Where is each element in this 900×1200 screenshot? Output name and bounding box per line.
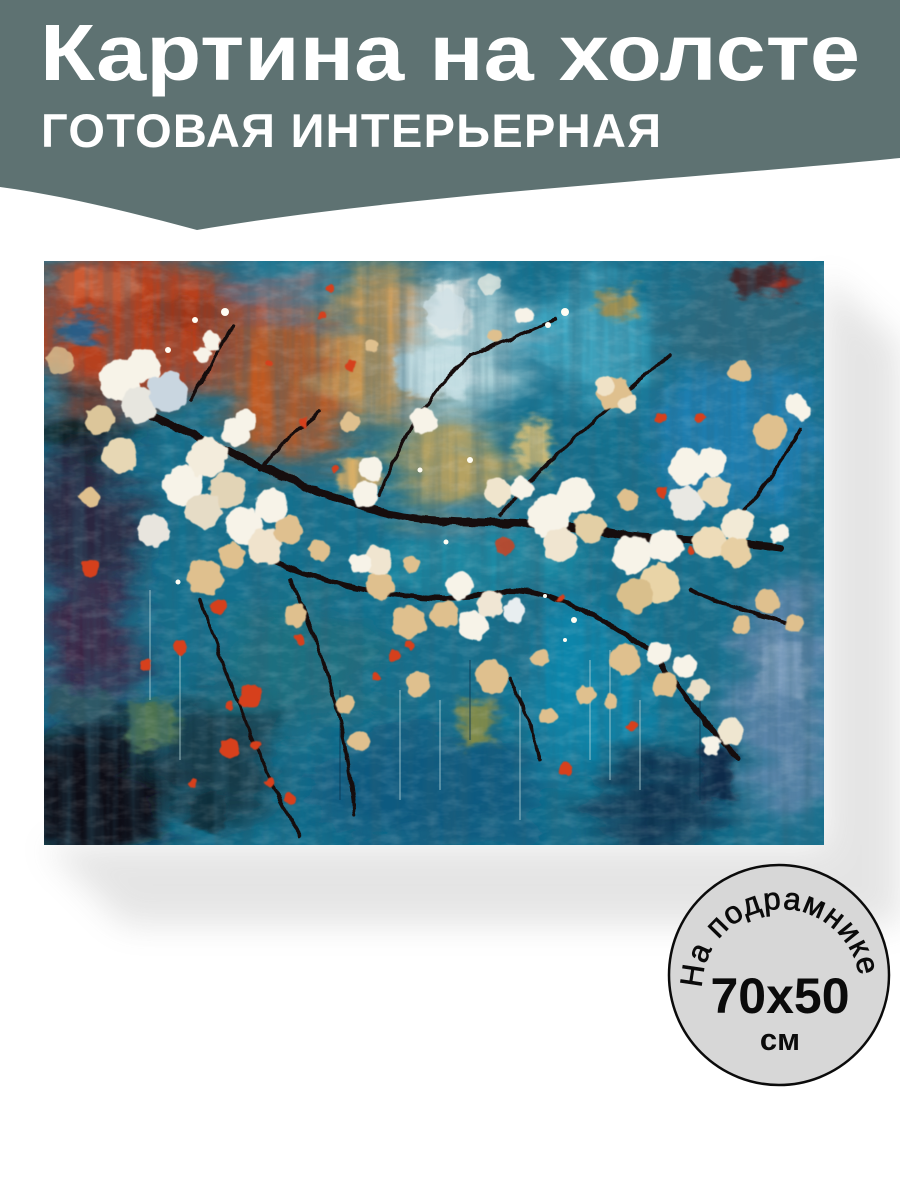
painted background [44,261,824,845]
badge size: 70x50 [710,968,850,1024]
subtitle: ГОТОВАЯ ИНТЕРЬЕРНАЯ [41,104,661,157]
branches [150,320,800,835]
badge curved label: На подрамнике [680,892,874,986]
vertical paint streaks [44,261,824,845]
header banner [0,0,900,230]
title: Картина на холсте [40,8,860,97]
white blossoms [85,272,811,755]
red petals [81,284,705,803]
cream blossoms [46,328,804,753]
badge unit: см [760,1022,800,1057]
light brush grain [44,261,824,845]
drips [150,590,700,820]
canvas shadow [44,275,900,925]
white speckles [165,308,577,642]
badge: size on stretcher [668,864,890,1086]
painting: blossoming branch on canvas [44,261,824,845]
badge circle [669,865,889,1085]
